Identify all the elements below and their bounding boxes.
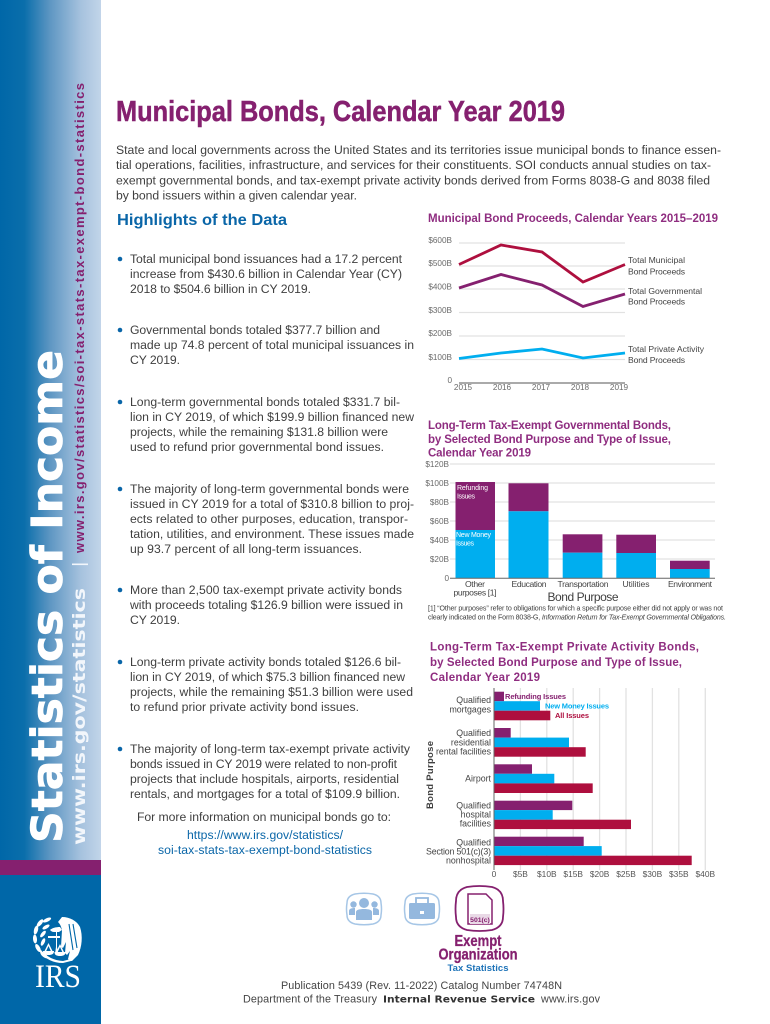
link text: soi-tax-stats-tax-exempt-bond-statistics: [158, 843, 372, 857]
bullet 2: Governmental bonds totaled $377.7 billion and: [130, 323, 380, 337]
line labels: Bond Proceeds: [628, 296, 685, 306]
chart heading: private activity bonds: [430, 642, 699, 684]
bar labels: [456, 485, 492, 548]
line labels: Bond Proceeds: [628, 355, 685, 365]
line chart: municipal bond proceeds: $200B: [428, 329, 453, 338]
category labels: facilities: [460, 818, 492, 828]
bars: qualified mortgages: [494, 692, 550, 720]
bullet 4: ects related to other purposes, education, transpor-: [130, 512, 408, 526]
footnote: [1] “Other purposes” refer to obligations for which a specific purpose either did not apply or was not: [428, 604, 723, 612]
value axis labels: $5B: [513, 869, 528, 879]
line chart: municipal bond proceeds: 2015: [454, 383, 473, 392]
bullet 7: projects that include hospitals, airports, residential: [130, 772, 399, 786]
stacked bar chart: governmental bonds: $120B: [425, 460, 450, 469]
sidebar url: white: www.irs.gov/statistics: [70, 588, 90, 845]
bullet 2: CY 2019.: [130, 353, 180, 367]
scales of justice: [43, 927, 66, 956]
footer publication text: [243, 980, 601, 1006]
category labels: Airport: [465, 774, 492, 784]
bullet 3: [118, 395, 414, 454]
stacked bar chart: governmental bonds: $20B: [430, 555, 450, 564]
category labels: residential: [451, 738, 491, 748]
horizontal bar chart: private activity bonds: [425, 688, 715, 879]
link text: [158, 828, 372, 857]
value axis labels: $35B: [669, 869, 689, 879]
exempt organization wordmark: Organization: [438, 946, 518, 964]
bar: other purposes: [456, 482, 495, 578]
line chart: municipal bond proceeds: 2018: [571, 383, 590, 392]
series legend labels: New Money Issues: [545, 702, 609, 710]
bullet 3: used to refund prior governmental bond issues.: [130, 440, 384, 454]
bars: qualified hospital facilities: [494, 801, 631, 829]
sidebar divider: [72, 564, 88, 565]
stacked bar chart: governmental bonds: $100B: [425, 479, 450, 488]
line chart: municipal bond proceeds: [428, 236, 705, 392]
category labels: Transportation: [558, 579, 609, 589]
value axis labels: [492, 869, 715, 879]
bullet 4: [118, 482, 414, 556]
category labels: Environment: [668, 579, 713, 589]
bullet 1: [118, 252, 403, 296]
exempt organization wordmark: Exempt: [454, 933, 502, 950]
bullet 2: made up 74.8 percent of total municipal issuances in: [130, 338, 414, 352]
bullet 4: issued in CY 2019 for a total of $310.8 billion to proj-: [130, 497, 414, 511]
bullet 3: Long-term governmental bonds totaled $331.7 bil-: [130, 395, 400, 409]
value axis labels: 0: [492, 869, 497, 879]
bar labels: Issues: [457, 494, 476, 500]
stacked bar chart: governmental bonds: 0: [444, 574, 449, 583]
exempt organization wordmark: Tax Statistics: [448, 963, 508, 974]
category labels: Qualified: [456, 800, 491, 810]
stacked bar chart: governmental bonds: [425, 460, 715, 604]
axis title: Bond Purpose: [548, 590, 619, 604]
chart heading: governmental bonds: Calendar Year 2019: [428, 448, 531, 460]
category labels: Section 501(c)(3): [426, 846, 491, 856]
line chart: municipal bond proceeds: 2019: [610, 383, 629, 392]
line: total municipal: [459, 245, 625, 282]
line chart: municipal bond proceeds: $100B: [428, 353, 453, 362]
bullet 6: lion in CY 2019, of which $75.3 billion financed new: [130, 670, 405, 684]
category labels: Qualified: [456, 695, 491, 705]
bar labels: Issues: [456, 540, 474, 548]
bar labels: Refunding: [457, 485, 488, 492]
value axis labels: $25B: [616, 869, 636, 879]
line labels: Total Municipal: [628, 255, 685, 265]
category labels: hospital: [461, 810, 491, 820]
bullet 7: The majority of long-term tax-exempt private activity: [130, 742, 411, 756]
intro text block: tial operations, facilities, infrastructure, and services for their constituents. SOI conducts annual studies on tax-: [116, 158, 711, 172]
bullet 1: 2018 to $504.6 billion in CY 2019.: [130, 282, 311, 296]
intro text block: State and local governments across the United States and its territories issue municipal bonds to finance essen-: [116, 143, 721, 157]
footer publication text: Internal Revenue Service: [383, 994, 535, 1006]
bullet 5: with proceeds totaling $126.9 billion were issued in: [129, 598, 403, 612]
bar: utilities: [616, 535, 656, 578]
category labels: mortgages: [449, 704, 492, 714]
line: total governmental: [459, 274, 625, 306]
value axis labels: $30B: [643, 869, 663, 879]
bullet 7: [118, 742, 411, 801]
value axis labels: $40B: [696, 869, 715, 879]
axis title: Bond Purpose: [425, 741, 436, 809]
category labels: Qualified: [456, 838, 491, 848]
chart heading: governmental bonds: Long-Term Tax-Exempt Governmental Bonds,: [428, 420, 671, 432]
bullet 3: projects, while the remaining $131.8 billion were: [130, 425, 388, 439]
bar: education: [508, 483, 548, 578]
bullet 7: rentals, and mortgages for a total of $109.9 billion.: [130, 787, 400, 801]
bullet 6: to refund prior private activity bond issues.: [130, 700, 359, 714]
chart heading: private activity bonds: Calendar Year 2019: [430, 672, 540, 684]
footnote: clearly indicated on the Form 8038-G, Information Return for Tax-Exempt Governmental Obligations.: [428, 614, 726, 622]
chart heading: governmental bonds: by Selected Bond Purpose and Type of Issue,: [428, 434, 671, 446]
line labels: [628, 255, 705, 365]
category labels: Education: [512, 579, 547, 589]
bars: qualified section 501(c)(3) nonhospital: [494, 837, 692, 865]
intro text block: by bond issuers within a given calendar year.: [116, 188, 357, 202]
IRS wordmark: IRS: [35, 959, 81, 995]
value axis labels: $15B: [563, 869, 583, 879]
category labels: nonhospital: [446, 856, 491, 866]
category labels: [426, 695, 492, 866]
line chart: municipal bond proceeds: 2017: [532, 383, 551, 392]
stacked bar chart: governmental bonds: $60B: [430, 517, 450, 526]
stacked bar chart: governmental bonds: $40B: [430, 536, 450, 545]
link text: https://www.irs.gov/statistics/: [187, 828, 344, 842]
icon: 501(c) document: 501(c): [470, 917, 490, 924]
bar: environment: [670, 561, 710, 578]
sidebar title: Statistics of Income: Statistics of Income: [24, 350, 73, 843]
chart heading: Municipal Bond Proceeds: Municipal Bond Proceeds, Calendar Years 2015–2019: [428, 213, 718, 225]
line chart: municipal bond proceeds: $400B: [428, 282, 453, 292]
bullet 4: tation, utilities, and environment. These issues made: [130, 527, 414, 541]
eagle wing: [58, 917, 82, 961]
bullet 5: More than 2,500 tax-exempt private activity bonds: [130, 583, 402, 597]
bullet 5: [118, 583, 403, 627]
chart heading: private activity bonds: Long-Term Tax-Exempt Private Activity Bonds,: [430, 642, 699, 654]
panel: sidebar: [0, 0, 101, 1024]
footer publication text: Publication 5439 (Rev. 11-2022) Catalog Number 74748N: [281, 980, 562, 992]
category labels: Qualified: [456, 728, 491, 738]
bar: transportation: [563, 534, 602, 578]
value axis labels: $20B: [590, 869, 610, 879]
line: total private activity: [459, 349, 625, 358]
line labels: Bond Proceeds: [628, 266, 685, 276]
series legend labels: Refunding Issues: [505, 692, 566, 701]
line chart: municipal bond proceeds: $300B: [428, 306, 453, 315]
line chart: municipal bond proceeds: 0: [447, 376, 452, 385]
chart heading: private activity bonds: by Selected Bond Purpose and Type of Issue,: [430, 657, 682, 669]
line chart: municipal bond proceeds: $600B: [428, 236, 453, 245]
category labels: Other: [465, 579, 485, 589]
chart heading: governmental bonds: [428, 420, 671, 460]
heading: Highlights of the Data: Highlights of the Data: [117, 212, 287, 229]
footnote: [428, 604, 726, 622]
intro text block: exempt governmental bonds, and tax-exempt private activity bonds derived from Forms 8038-G and 8038 filed: [116, 174, 710, 188]
category labels: rental facilities: [436, 746, 492, 756]
bullet 6: projects, while the remaining $51.3 billion were used: [130, 685, 413, 699]
more information text: For more information on municipal bonds go to:: [137, 810, 391, 824]
series legend labels: [505, 692, 609, 720]
bars: qualified residential rental facilities: [494, 728, 586, 757]
bars: airport: [494, 764, 593, 793]
bullet 5: CY 2019.: [130, 613, 180, 627]
line chart: municipal bond proceeds: 2016: [493, 383, 512, 392]
icon: 501(c) document: [456, 886, 504, 931]
bullet 4: up 93.7 percent of all long-term issuances.: [130, 542, 362, 556]
icon: people: [346, 893, 382, 925]
bullet 6: Long-term private activity bonds totaled $126.6 bil-: [130, 655, 401, 669]
category labels: [454, 579, 713, 598]
value axis labels: $10B: [537, 869, 557, 879]
category labels: purposes [1]: [454, 588, 496, 598]
line labels: Total Governmental: [628, 286, 702, 296]
bullet 7: bonds issued in CY 2019 were related to non-profit: [130, 757, 398, 771]
icon: IRS logo: [33, 916, 82, 995]
line labels: Total Private Activity: [628, 344, 705, 354]
bullet 1: increase from $430.6 billion in Calendar Year (CY): [130, 267, 402, 281]
title: Municipal Bonds, Calendar Year 2019: [116, 96, 565, 128]
line chart: municipal bond proceeds: $500B: [428, 259, 453, 268]
icon: briefcase: [404, 893, 440, 925]
bar labels: New Money: [456, 532, 492, 539]
intro text block: [116, 143, 721, 202]
stacked bar chart: governmental bonds: $80B: [430, 498, 450, 507]
sidebar url: purple: www.irs.gov/statistics/soi-tax-stats-tax-exempt-bond-statistics: [72, 83, 87, 554]
footer publication text: www.irs.gov: [540, 994, 601, 1006]
footer publication text: Department of the Treasury: [243, 994, 378, 1006]
bullet 2: [118, 323, 414, 367]
laurel branch: [33, 916, 71, 963]
bullet 3: lion in CY 2019, of which $199.9 billion financed new: [130, 410, 414, 424]
series legend labels: All Issues: [555, 711, 589, 720]
highlights bullet list: [118, 252, 414, 801]
bullet 6: [118, 655, 413, 714]
exempt organization wordmark: [438, 933, 518, 974]
bullet 4: The majority of long-term governmental bonds were: [130, 482, 409, 496]
category labels: Utilities: [622, 579, 650, 589]
bullet 1: Total municipal bond issuances had a 17.2 percent: [130, 252, 403, 266]
